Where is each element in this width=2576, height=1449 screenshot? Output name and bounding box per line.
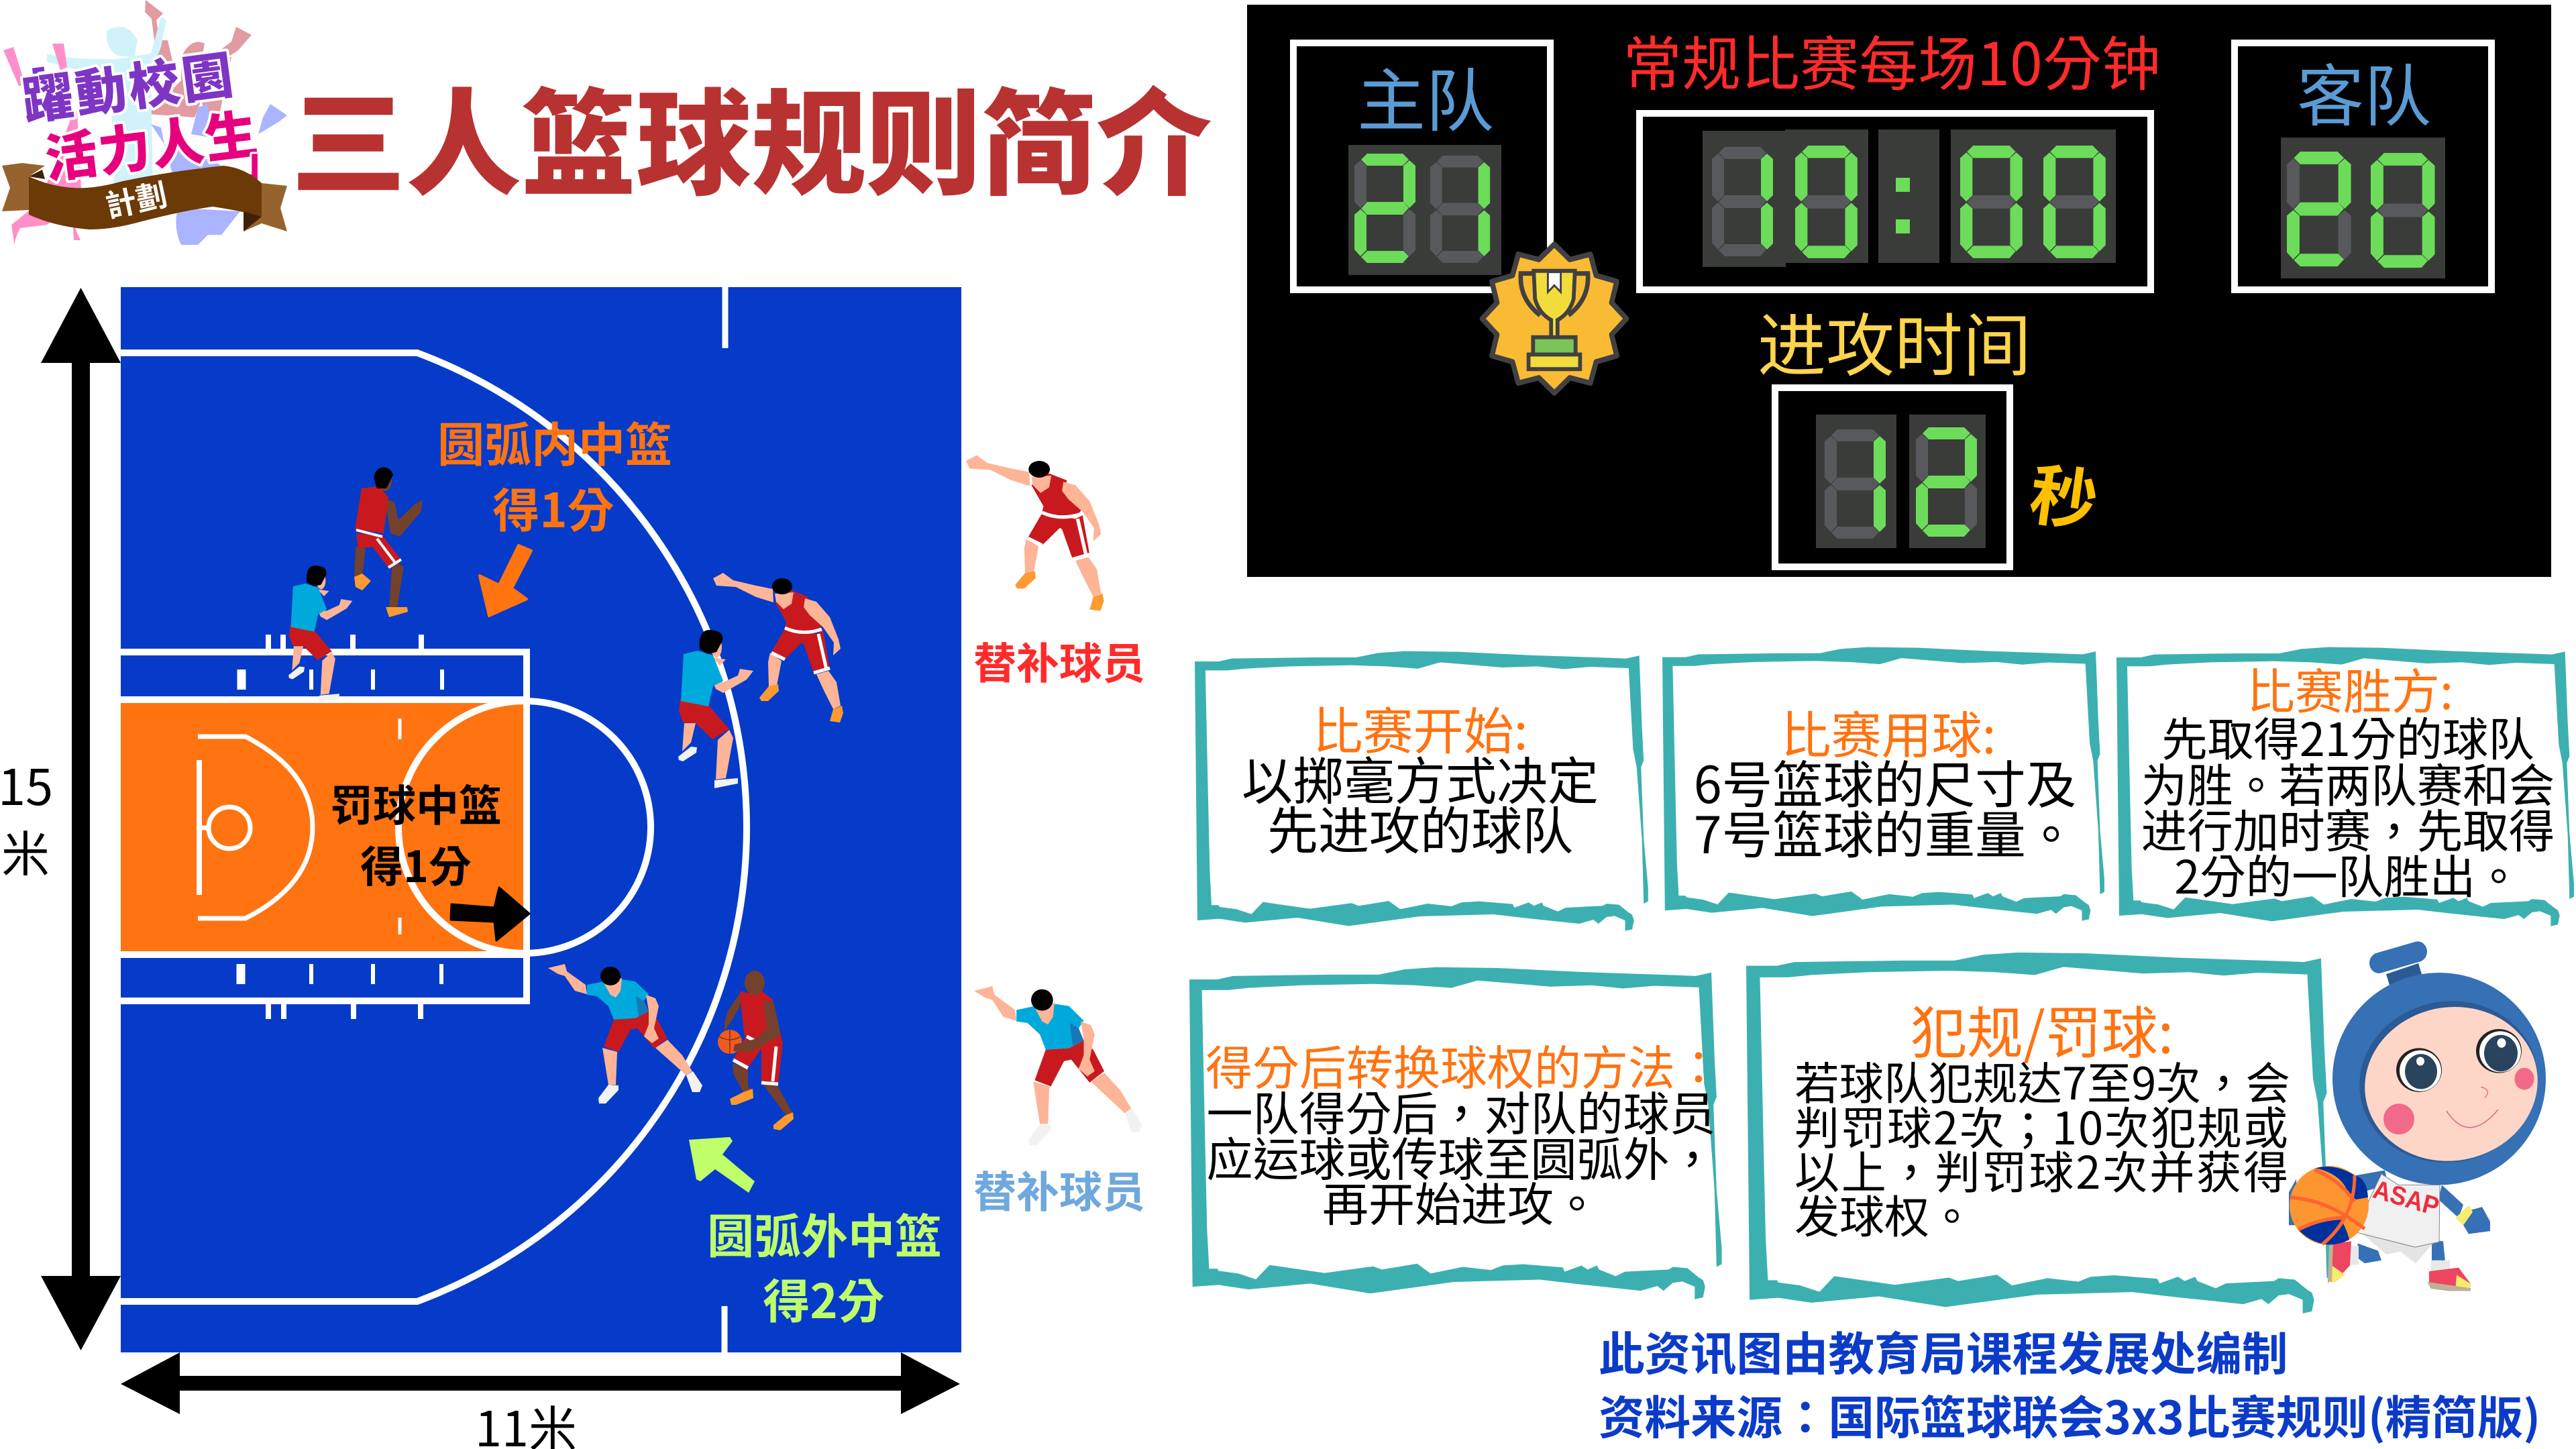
footer: compiled by: 此资讯图由教育局课程发展处编制 xyxy=(1599,1318,2288,1384)
panel: winner: 比赛胜方: xyxy=(2247,653,2453,723)
panel: winner: 进行加时赛，先取得 xyxy=(2141,795,2555,861)
mascot xyxy=(2289,939,2546,1291)
game clock box xyxy=(1640,113,2151,290)
player: blue defender right xyxy=(678,630,753,788)
panel: change of possession: 一队得分后，对队的球员 xyxy=(1206,1077,1716,1144)
player: dark 12 with ball xyxy=(718,971,794,1130)
panel: game ball: 7号篮球的重量。 xyxy=(1694,794,2076,868)
shot clock box xyxy=(1775,388,2010,567)
player: blue defender bottom xyxy=(548,964,702,1104)
panel: winner xyxy=(2116,647,2574,926)
arrow: lime xyxy=(689,1137,755,1193)
home team box: 主队 xyxy=(1357,47,1494,146)
substitute player: blue xyxy=(974,986,1142,1145)
arrow: orange xyxy=(480,545,531,616)
mascot: ASAP xyxy=(2370,1174,2442,1222)
shot clock heading: 进攻时间 xyxy=(1758,292,2031,390)
panel: winner: 先取得21分的球队 xyxy=(2161,703,2534,769)
panel: fouls: 判罚球2次；10次犯规或 xyxy=(1794,1093,2288,1158)
away team box: 客队 xyxy=(2297,42,2431,140)
panel: fouls: 犯规/罚球: xyxy=(1911,989,2174,1070)
player: red 8 xyxy=(713,573,843,722)
panel: change of possession xyxy=(1189,967,1722,1299)
panel: winner: 2分的一队胜出。 xyxy=(2174,841,2522,907)
panel: winner: 为胜。若两队赛和会 xyxy=(2141,749,2555,816)
panel: change of possession: 应运球或传球至圆弧外， xyxy=(1206,1122,1716,1189)
dimension arrow: 15 metres xyxy=(41,288,121,1350)
panel: game ball: 比赛用球: xyxy=(1781,695,1996,768)
panel: fouls: 若球队犯规达7至9次，会 xyxy=(1794,1049,2290,1113)
player: red 11 xyxy=(354,467,423,617)
dimension arrow: 11 metres xyxy=(121,1352,960,1414)
substitute label: blue: 替补球员 xyxy=(973,1159,1145,1220)
label: inside arc scoring: 圆弧内中篮 xyxy=(437,408,672,476)
logo: 躍動校園 活力人生 計劃 xyxy=(2,0,287,247)
logo: 躍動校園 活力人生 計劃: 」 xyxy=(243,129,283,188)
title: 三人篮球规则简介 xyxy=(291,52,1212,219)
logo: 躍動校園 活力人生 計劃: 躍動校園 xyxy=(17,34,239,134)
panel: game start: 先进攻的球队 xyxy=(1267,790,1573,864)
seconds label: 秒 xyxy=(2025,440,2104,545)
logo: 躍動校園 活力人生 計劃: 活力人生 xyxy=(40,93,262,193)
substitute label: red: 替补球员 xyxy=(973,630,1145,692)
away team box xyxy=(2235,42,2491,290)
panel: scoreboard xyxy=(1247,5,2551,577)
label: inside arc points: 得1分 xyxy=(492,474,614,541)
panel: game start: 以掷毫方式决定 xyxy=(1242,741,1599,814)
panel: fouls xyxy=(1746,953,2332,1313)
label: outside arc scoring: 圆弧外中篮 xyxy=(707,1199,942,1267)
panel: change of possession: 得分后转换球权的方法： xyxy=(1205,1031,1722,1099)
label: free throw points: 得1分 xyxy=(360,833,472,895)
dimension label: 米: 米 xyxy=(1,815,50,885)
panel: game start: 比赛开始: xyxy=(1313,691,1527,764)
footer: source: 资料来源：国际篮球联会3x3比赛规则(精简版) xyxy=(1599,1381,2540,1448)
panel: game ball: 6号篮球的尺寸及 xyxy=(1694,744,2076,818)
panel: fouls: 以上，判罚球2次并获得 xyxy=(1794,1137,2288,1202)
panel: change of possession: 再开始进攻。 xyxy=(1322,1167,1600,1234)
label: outside arc points: 得2分 xyxy=(763,1265,885,1332)
arrow: black xyxy=(451,888,529,941)
game time heading: 常规比赛每场10分钟 xyxy=(1623,17,2161,103)
logo: 躍動校園 活力人生 計劃: 計劃 xyxy=(101,170,170,227)
panel: fouls: 发球权。 xyxy=(1794,1181,1974,1246)
label: free throw: 罚球中篮 xyxy=(330,772,502,834)
player: blue defender left xyxy=(288,566,352,702)
logo: 躍動校園 活力人生 計劃: 「 xyxy=(9,56,50,111)
icon: trophy badge xyxy=(1482,244,1627,393)
panel: game ball xyxy=(1662,647,2104,921)
panel: game start xyxy=(1195,651,1648,931)
home team box xyxy=(1293,43,1550,290)
court xyxy=(121,287,961,1352)
substitute player: red xyxy=(966,455,1104,611)
